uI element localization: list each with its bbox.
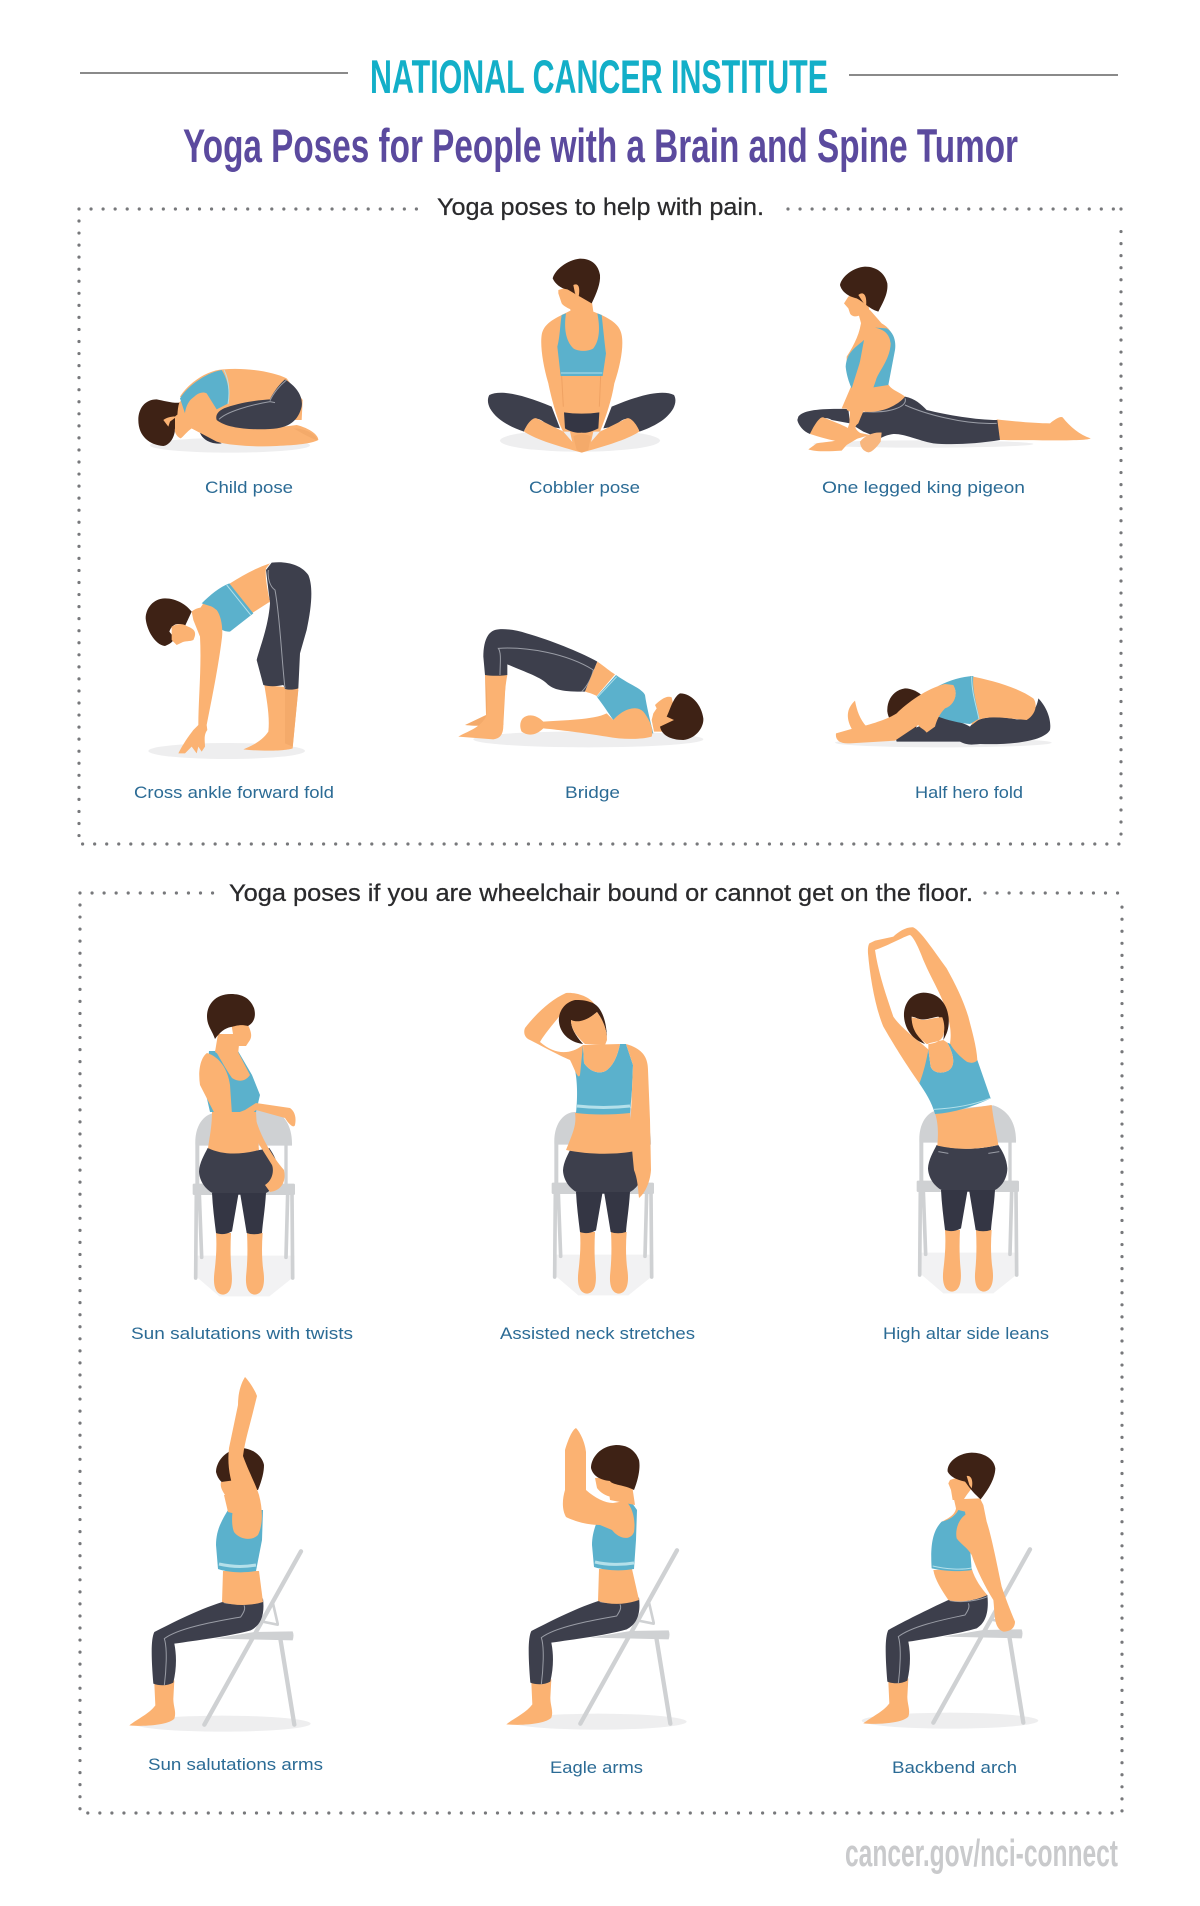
label: eagle arms: Eagle arms [550,1758,643,1777]
label: high altar side leans: High altar side leans [883,1324,1049,1343]
figure: child pose [138,369,318,453]
figure: cross ankle forward fold [146,562,311,759]
figure: eagle arms [506,1428,687,1730]
label: child pose: Child pose [205,478,293,497]
header: National Cancer Institute: NATIONAL CANCER INSTITUTE [370,50,828,103]
figure: half hero fold [835,676,1052,747]
label: one legged king pigeon: One legged king pigeon [822,478,1025,497]
figure: sun salutations arms [129,1377,311,1732]
label: sun salutations with twists: Sun salutations with twists [131,1324,353,1343]
label: half hero fold: Half hero fold [915,783,1023,802]
panel heading: wheelchair: Yoga poses if you are wheelchair bound or cannot get on the floor. [229,880,973,907]
label: cross ankle forward fold: Cross ankle forward fold [134,783,334,802]
figure: high altar side leans [868,927,1019,1293]
figure: one legged king pigeon [797,267,1091,452]
figure: cobbler pose [488,259,675,453]
figure: assisted neck stretches [524,993,654,1295]
panel: wheelchair or cannot get on the floor [80,880,1126,1813]
label: sun salutations arms: Sun salutations arms [148,1755,323,1774]
label: backbend arch: Backbend arch [892,1758,1017,1777]
label: bridge: Bridge [565,783,620,802]
label: assisted neck stretches: Assisted neck stretches [500,1324,695,1343]
figure: sun salutations with twists [193,994,296,1296]
panel: yoga poses to help with pain [79,194,1121,844]
figure: backbend arch [862,1453,1038,1729]
label: cobbler pose: Cobbler pose [529,478,640,497]
figure: bridge [458,629,703,747]
panel heading: pain: Yoga poses to help with pain. [437,194,764,221]
